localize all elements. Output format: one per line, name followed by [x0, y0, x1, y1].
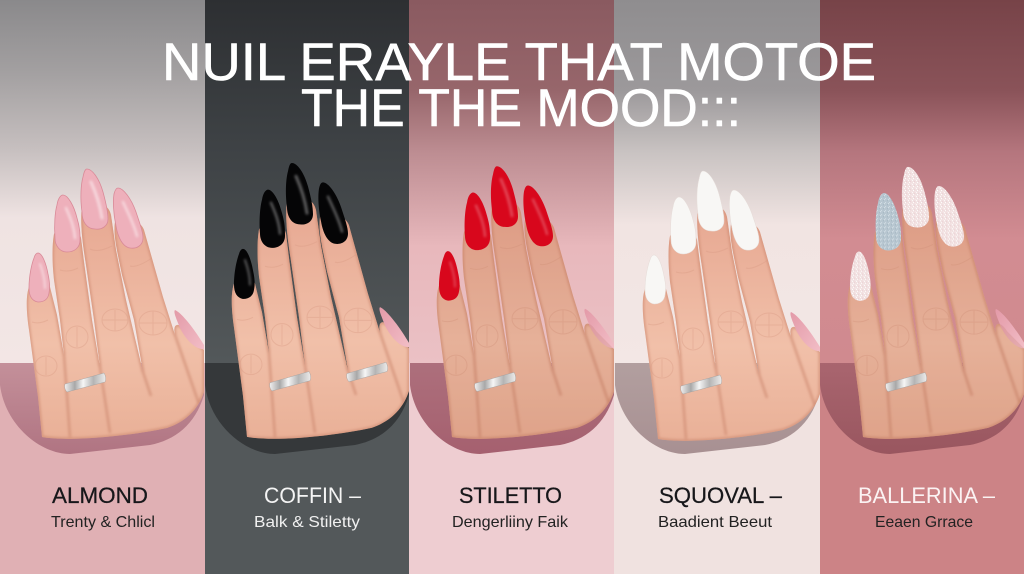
panel: almond	[0, 0, 205, 574]
title	[162, 33, 876, 138]
ballerina hand with glitter nails	[848, 167, 1024, 439]
coffin caption: Balk & Stiletty	[254, 514, 360, 531]
almond hand shadow	[0, 363, 204, 454]
ballerina panel background	[820, 0, 1024, 363]
coffin hand with black nails	[232, 163, 409, 439]
ballerina hand shadow	[820, 363, 1024, 454]
squoval label: SQUOVAL –	[659, 483, 783, 508]
panel: ballerina	[820, 0, 1024, 574]
stiletto hand with red nails	[437, 166, 614, 439]
squoval hand shadow	[615, 363, 819, 454]
almond hand with pink nails	[27, 169, 204, 439]
coffin hand shadow	[205, 363, 409, 454]
stiletto caption: Dengerliiny Faik	[452, 514, 569, 531]
almond caption: Trenty & Chlicl	[51, 514, 155, 531]
ballerina caption: Eeaen Grrace	[875, 514, 973, 531]
coffin label: COFFIN –	[264, 483, 362, 508]
stiletto hand shadow	[410, 363, 614, 454]
ballerina label: BALLERINA –	[858, 483, 996, 508]
squoval panel background	[614, 0, 820, 363]
panel: coffin	[205, 0, 409, 574]
squoval hand with white nails	[643, 171, 820, 441]
title: THE THE MOOD:::	[301, 79, 741, 138]
panel: squoval	[614, 0, 820, 574]
title: NUIL ERAYLE THAT MOTOE	[162, 33, 876, 92]
coffin panel background	[205, 0, 409, 363]
almond panel background	[0, 0, 205, 363]
stiletto panel background	[409, 0, 614, 363]
almond label: ALMOND	[52, 483, 148, 508]
stiletto label: STILETTO	[459, 483, 562, 508]
squoval caption: Baadient Beeut	[658, 514, 773, 531]
panel: stiletto	[409, 0, 614, 574]
